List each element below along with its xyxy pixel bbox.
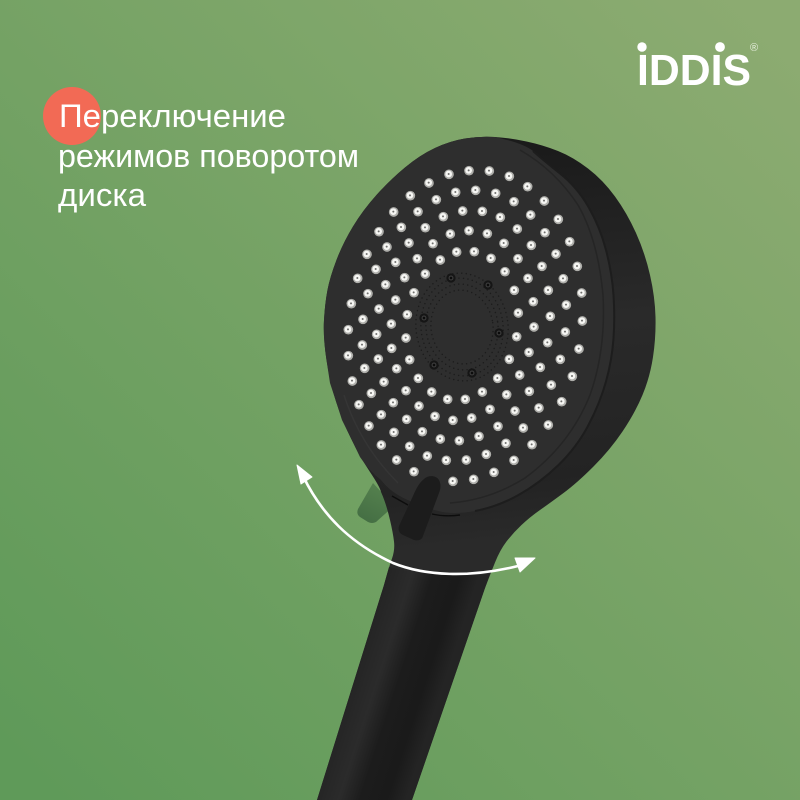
shower head [317,137,656,800]
ghost position of switch lever [357,483,394,523]
white spray nozzles, upper half [343,166,587,373]
left inner rim [344,395,398,483]
head and neck silhouette [317,137,656,800]
dark centre nozzles [419,273,504,378]
lever slit lines [392,496,460,516]
rotation arrow [297,465,535,574]
switch lever [399,476,440,540]
disc inner ring [450,150,603,503]
logo: iddis: IDDIS [637,46,751,95]
heading: диска [58,177,146,213]
logo: iddis: ® [750,42,758,54]
disc rim groove [475,151,614,511]
nozzle micro perforation rings [409,267,515,387]
heading: режимов поворотом [58,138,359,174]
red accent circle [43,87,101,145]
heading [58,98,359,213]
handle shading [317,567,490,800]
white spray nozzles, lower half [347,370,577,486]
front disc [324,137,614,513]
heading: Переключение [59,98,286,134]
